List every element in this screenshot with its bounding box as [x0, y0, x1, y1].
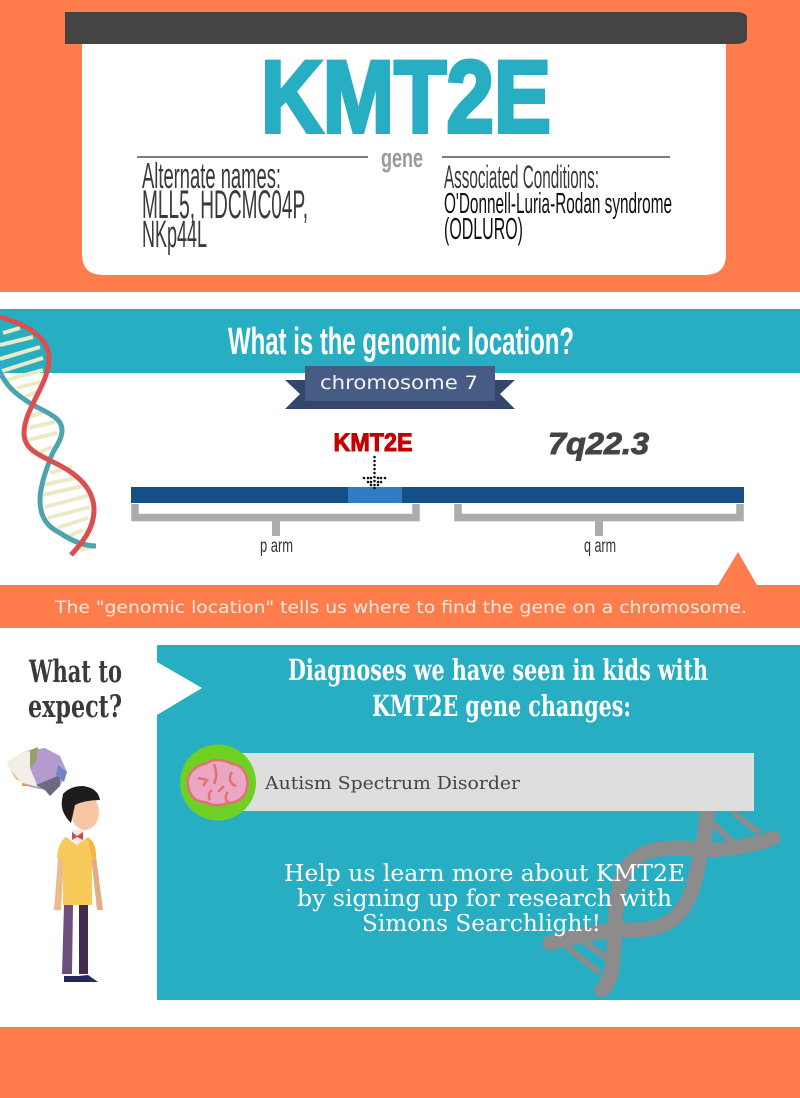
p arm bracket: p arm	[260, 536, 293, 557]
icon: person	[54, 786, 103, 982]
heading: what to expect	[28, 654, 122, 725]
dotted arrow	[363, 456, 386, 489]
alternate names: Alternate names:	[142, 155, 281, 196]
associated conditions: (ODLURO)	[444, 211, 523, 246]
heading: what to expect: expect?	[28, 689, 122, 725]
shoes	[64, 976, 78, 982]
panel: diagnoses	[157, 645, 800, 1000]
heading: What is the genomic location?	[228, 321, 574, 363]
locus label: 7q22.3	[548, 426, 649, 461]
dark top bar	[65, 12, 747, 44]
ribbon: chromosome 7	[285, 366, 515, 409]
alternate names: NKp44L	[142, 214, 207, 256]
alternate names	[142, 155, 308, 256]
callout: genomic location definition: The "genomic location" tells us where to find the gene on a chromosome.	[54, 598, 747, 618]
call to action: by signing up for research with	[297, 886, 672, 912]
icon: polygon brain	[7, 747, 67, 796]
panel: header	[0, 0, 800, 292]
heading: KMT2E gene changes:	[372, 689, 631, 723]
shirt	[57, 837, 96, 905]
diagnosis row: autism	[180, 744, 754, 820]
white clipboard card	[82, 30, 726, 275]
ribbon: chromosome 7: chromosome 7	[320, 372, 478, 394]
hair	[62, 786, 100, 823]
call to action	[284, 861, 685, 937]
arms	[54, 858, 64, 910]
q arm bracket	[458, 504, 740, 557]
chromosome diagram	[131, 456, 744, 557]
face	[71, 794, 99, 830]
trousers	[62, 905, 73, 974]
gene divider: gene	[381, 143, 423, 173]
p arm bracket	[135, 504, 416, 557]
footer band	[0, 1027, 800, 1098]
icon: DNA helix	[0, 317, 96, 555]
q arm bracket: q arm	[584, 536, 616, 557]
gene label: KMT2E	[334, 429, 412, 457]
call to action: Help us learn more about KMT2E	[284, 861, 685, 887]
panel: header: MLL5, HDCMC04P,	[142, 183, 308, 227]
panel: genomic location banner	[0, 309, 800, 373]
icon: brain	[188, 760, 247, 805]
callout: genomic location definition	[0, 552, 800, 628]
associated conditions: Associated Conditions:	[444, 159, 599, 195]
neck	[72, 830, 84, 846]
call to action: Simons Searchlight!	[362, 911, 601, 937]
diagnosis row: autism: Autism Spectrum Disorder	[264, 773, 520, 794]
title: KMT2E	[261, 40, 551, 154]
heading	[288, 653, 708, 723]
heading: what to expect: What to	[28, 654, 122, 690]
associated conditions	[444, 159, 672, 246]
icon: grey DNA	[550, 813, 773, 990]
